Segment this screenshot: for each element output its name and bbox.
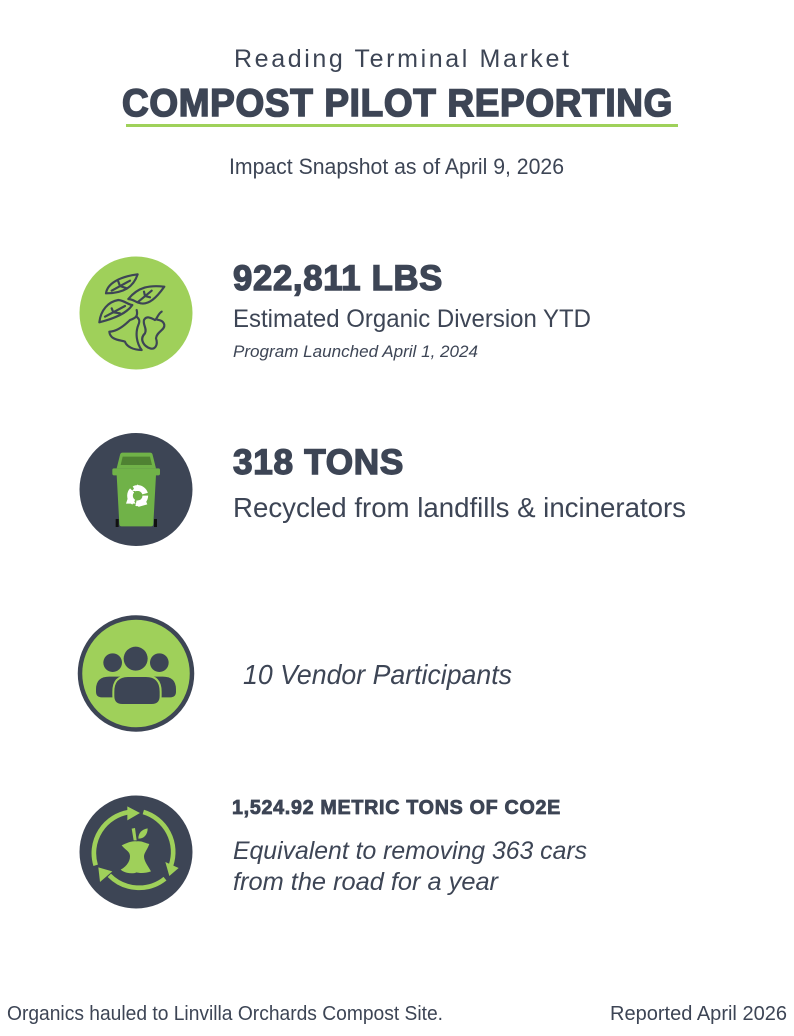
header [122, 45, 678, 179]
emissions equivalence: Equivalent to removing 363 cars [233, 837, 587, 865]
title underline [126, 124, 678, 127]
report date: Reported April 2026 [610, 1003, 787, 1025]
icon: recycling bin [80, 433, 192, 546]
icon: people group [80, 618, 192, 730]
footer [7, 1003, 787, 1025]
icon: apple core cycle [80, 796, 192, 908]
emissions equivalence: from the road for a year [233, 868, 500, 896]
snapshot date: Impact Snapshot as of April 9, 2026 [229, 154, 564, 179]
diversion label: Estimated Organic Diversion YTD [233, 305, 591, 333]
diversion total: 922,811 LBS [233, 259, 443, 298]
vendor count: 10 Vendor Participants [243, 659, 512, 690]
panel: vendors [80, 618, 512, 730]
panel: tons recycled [80, 433, 686, 546]
icon: leaves and pears [80, 256, 192, 370]
title: COMPOST PILOT REPORTING [122, 82, 673, 125]
panel: emissions [80, 796, 587, 908]
emissions total: 1,524.92 METRIC TONS OF CO2E [232, 797, 561, 819]
panel: organic diversion [80, 256, 591, 370]
subtitle: Reading Terminal Market [234, 45, 569, 73]
tons total: 318 TONS [233, 443, 404, 482]
tons label: Recycled from landfills & incinerators [233, 492, 686, 523]
launch date: Program Launched April 1, 2024 [233, 342, 478, 361]
emissions equivalence [233, 837, 587, 896]
hauling note: Organics hauled to Linvilla Orchards Compost Site. [7, 1003, 443, 1025]
